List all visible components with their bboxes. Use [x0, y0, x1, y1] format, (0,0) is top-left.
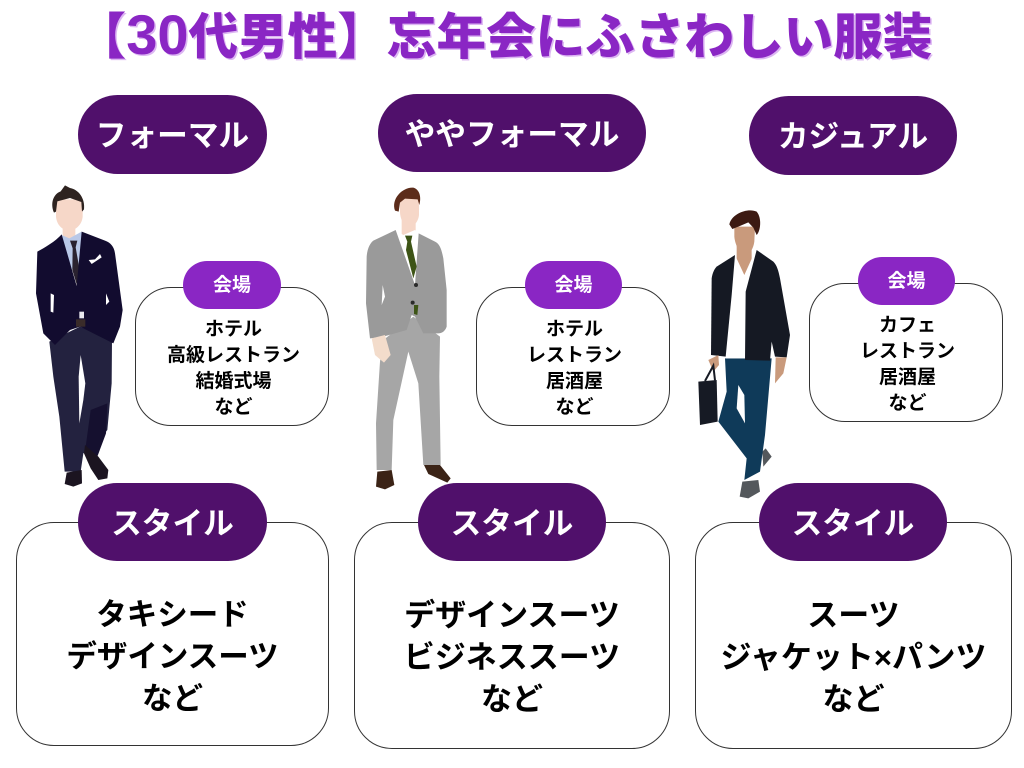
style box: semi-formal: デザインスーツ — [404, 598, 620, 632]
venue box: casual — [809, 283, 1003, 422]
venue box: casual: など — [888, 393, 926, 414]
style box: semi-formal — [354, 522, 670, 749]
venue box: casual: カフェ — [879, 315, 936, 336]
style label: semi-formal: スタイル — [451, 506, 573, 540]
style label: formal — [78, 483, 267, 561]
style box: casual: ジャケット×パンツ — [720, 640, 987, 674]
venue box: semi-formal — [476, 287, 670, 426]
style label: formal: スタイル — [111, 506, 234, 540]
heading pill: semi-formal — [378, 94, 646, 172]
title: 【30代男性】忘年会にふさわしい服装 — [77, 3, 932, 66]
venue box: formal: 高級レストラン — [167, 345, 300, 366]
venue box: casual: 居酒屋 — [879, 367, 936, 388]
style label: casual: スタイル — [792, 506, 914, 540]
venue box: semi-formal: 居酒屋 — [546, 371, 603, 392]
style box: formal — [16, 522, 329, 746]
heading pill: semi-formal: ややフォーマル — [405, 116, 619, 152]
venue box: formal: など — [214, 397, 252, 418]
style box: formal: タキシード — [96, 598, 249, 632]
venue label: formal: 会場 — [213, 274, 251, 296]
style box: casual: など — [822, 682, 884, 716]
style box: semi-formal: ビジネススーツ — [404, 640, 620, 674]
venue box: semi-formal: ホテル — [546, 319, 603, 340]
venue label: casual: 会場 — [887, 270, 926, 292]
style label: semi-formal — [418, 483, 606, 561]
style label: casual — [759, 483, 947, 561]
venue label: formal — [183, 261, 281, 309]
heading pill: casual: カジュアル — [778, 119, 928, 154]
heading pill: formal — [78, 95, 267, 174]
venue box: formal: 結婚式場 — [195, 371, 272, 392]
style box: formal: デザインスーツ — [66, 640, 279, 674]
style box: semi-formal: など — [481, 682, 543, 716]
style box: casual — [695, 522, 1012, 749]
venue label: casual — [858, 257, 955, 305]
venue label: semi-formal: 会場 — [554, 274, 592, 296]
heading pill: formal: フォーマル — [96, 118, 249, 153]
venue box: semi-formal: レストラン — [527, 345, 622, 366]
heading pill: casual — [749, 96, 957, 175]
venue label: semi-formal — [525, 261, 622, 309]
venue box: casual: レストラン — [860, 341, 955, 362]
venue box: formal — [135, 287, 329, 426]
style box: formal: など — [142, 682, 203, 716]
venue box: formal: ホテル — [205, 319, 262, 340]
venue box: semi-formal: など — [555, 397, 594, 418]
style box: casual: スーツ — [807, 598, 900, 632]
